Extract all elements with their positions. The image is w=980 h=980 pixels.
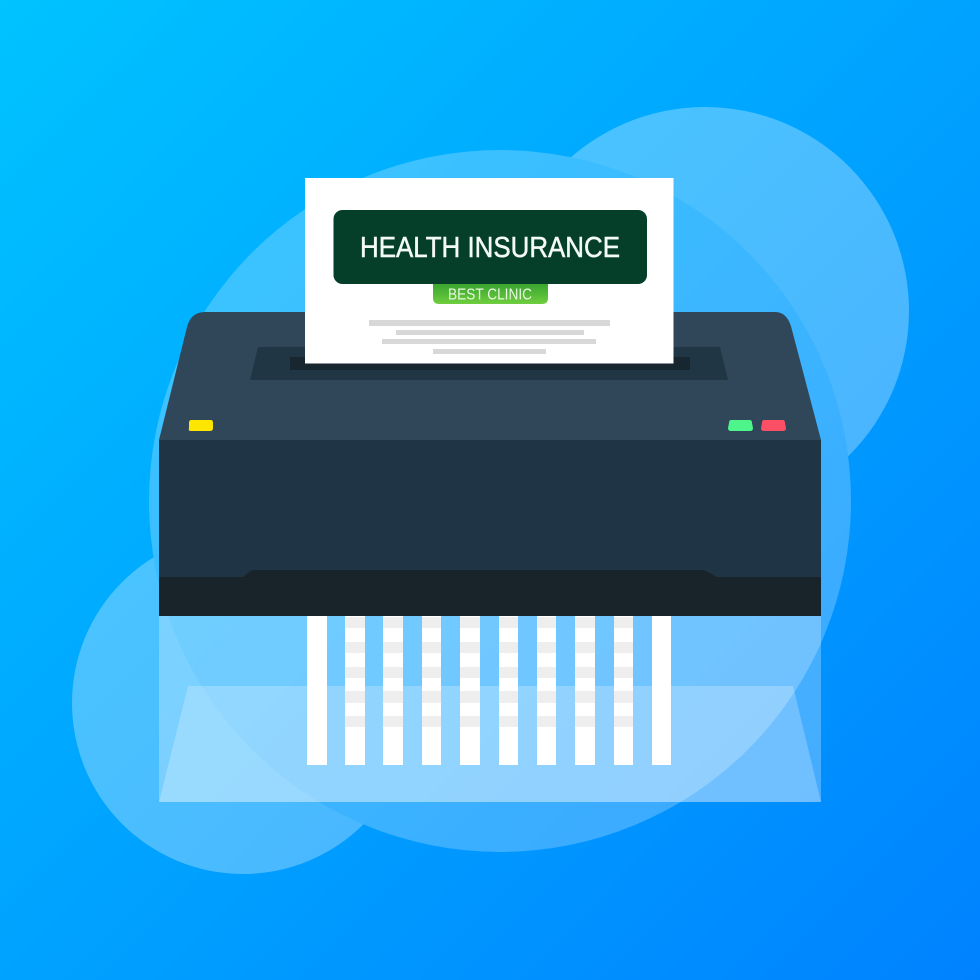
green ribbon: best clinic: BEST CLINIC — [448, 286, 532, 304]
shredded paper strips — [307, 616, 671, 765]
green ribbon: best clinic — [433, 283, 548, 304]
shredder — [159, 312, 821, 616]
indicator: yellow — [189, 420, 213, 431]
indicator: green — [728, 420, 753, 431]
shredder body — [159, 440, 821, 578]
shredder top panel — [159, 312, 821, 440]
background blobs — [72, 107, 909, 874]
indicator: red — [761, 420, 786, 431]
bin floor — [159, 686, 821, 802]
title banner: HEALTH INSURANCE — [360, 232, 620, 264]
paper slot — [290, 357, 690, 370]
bin back panel — [159, 616, 821, 802]
collection bin — [159, 616, 821, 802]
blob: small circles behind center — [72, 107, 909, 874]
paper slot recess — [250, 347, 728, 380]
title banner — [334, 210, 647, 284]
document text lines — [369, 320, 610, 354]
shredder base band — [159, 570, 821, 616]
blob: center circle — [149, 150, 851, 852]
document — [305, 178, 674, 364]
paper sheet — [305, 178, 674, 364]
strip shading bands — [345, 617, 633, 727]
